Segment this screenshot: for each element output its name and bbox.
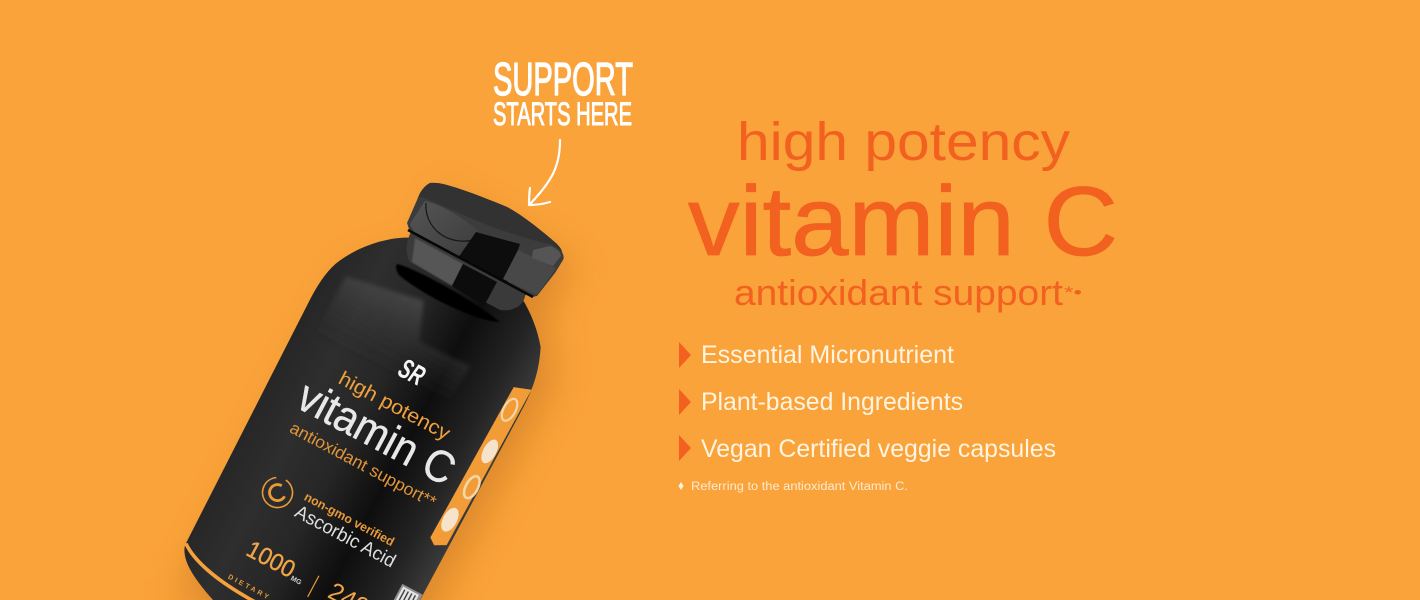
label: non-gmo verified: non-gmo verified — [302, 490, 397, 549]
icon: bullet arrow 1 — [679, 342, 691, 368]
icon: bullet arrow 3 — [679, 435, 691, 461]
benefit: plant-based ingredients: Plant-based Ingredients — [701, 388, 963, 416]
benefit list — [679, 341, 1056, 463]
supplement bottle — [156, 183, 569, 600]
label: high potency: high potency — [335, 368, 454, 445]
benefit: vegan certified veggie capsules: Vegan Certified veggie capsules — [701, 435, 1056, 463]
cap dome — [418, 183, 562, 252]
screw cap — [407, 183, 564, 297]
heading: vitamin C: vitamin C — [688, 166, 1118, 276]
bottle neck — [406, 232, 526, 310]
benefit: essential micronutrient: Essential Micronutrient — [701, 341, 954, 369]
callout: support starts here — [493, 53, 633, 132]
cap bottom groove — [408, 230, 533, 297]
label: Ascorbic Acid: Ascorbic Acid — [291, 502, 399, 572]
side panel with icons — [428, 380, 532, 551]
callout: support starts here: STARTS HERE — [493, 96, 632, 132]
cap panel arc — [425, 203, 470, 242]
shoulder dark band — [396, 264, 500, 322]
bottom stripe — [184, 542, 256, 600]
footnote marks: *• — [1064, 283, 1082, 302]
label: antioxidant support: antioxidant support** — [287, 418, 440, 512]
heading: high potency: high potency — [737, 112, 1070, 172]
neck dark centre — [452, 264, 497, 306]
callout: support starts here: SUPPORT — [493, 53, 633, 105]
cap black centre — [458, 232, 520, 283]
neck reflection left — [412, 238, 463, 286]
barcode box — [394, 584, 422, 600]
icon: bullet arrow 2 — [679, 389, 691, 415]
cap left panel — [410, 201, 471, 248]
bottle body — [184, 238, 541, 600]
arrow: pointing to bottle — [529, 140, 560, 205]
heading: antioxidant support: antioxidant support — [734, 272, 1063, 313]
label: 1000: 1000 — [242, 536, 300, 584]
cap right panel — [503, 250, 556, 295]
bottle drop shadow — [178, 238, 573, 600]
logo: SR — [394, 352, 431, 392]
footnote: Referring to the antioxidant Vitamin C. — [691, 481, 908, 493]
infographic canvas — [178, 62, 1114, 600]
shoulder reflection — [336, 277, 469, 383]
product label text — [184, 360, 532, 600]
label: vitamin C: vitamin C — [289, 370, 464, 495]
cap corner tab — [532, 246, 561, 266]
label: MG: MG — [289, 575, 303, 587]
label: divider — [307, 575, 319, 597]
icon: vitamin C badge — [262, 476, 294, 508]
